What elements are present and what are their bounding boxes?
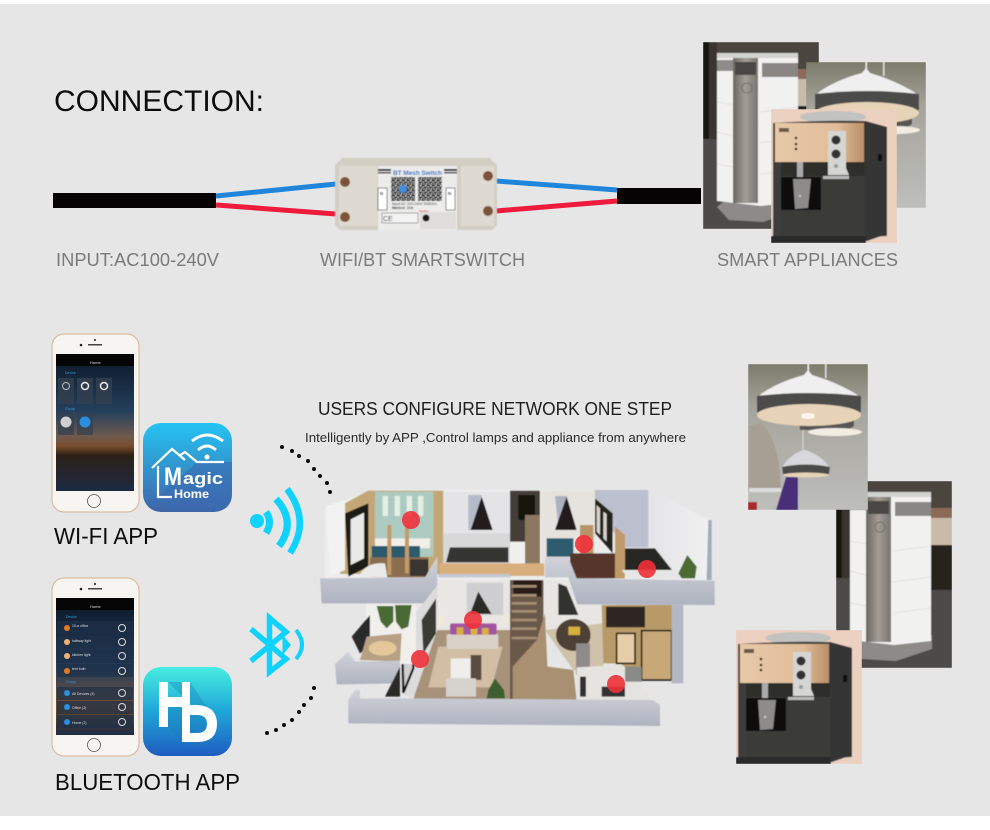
white end wall — [648, 490, 708, 578]
subheading: Intelligently by APP ,Control lamps and appliance from anywhere — [305, 431, 686, 445]
output black cable — [617, 188, 701, 204]
phone: bluetooth app: tent bulb — [72, 667, 85, 671]
dotted signal line: bluetooth — [265, 686, 316, 735]
phone: wi-fi app: Device — [65, 371, 76, 375]
label: bluetooth app: BLUETOOTH APP — [55, 769, 240, 795]
icon: wi-fi waves — [250, 489, 300, 553]
phone: bluetooth app: hallway light — [72, 639, 91, 643]
red output wire — [496, 201, 617, 211]
smart switch device: N — [448, 191, 451, 196]
smart switch device: N — [380, 191, 383, 196]
photo: air purifier — [836, 481, 952, 668]
red input wire — [216, 205, 336, 214]
smart switch device: Input:AC 100-240V 50/60Hz — [392, 202, 437, 206]
phone: bluetooth app — [52, 578, 139, 756]
wiring diagram — [53, 158, 701, 230]
left bedroom — [340, 491, 443, 574]
phone: wi-fi app — [52, 334, 139, 512]
phone: wi-fi app: Home — [90, 360, 101, 365]
appliance collage: top — [703, 42, 926, 243]
stair wall — [510, 491, 540, 562]
title: connection: CONNECTION: — [54, 85, 264, 118]
phone: bluetooth app: All Devices (4) — [72, 692, 95, 696]
left terrace — [335, 604, 416, 697]
central room — [443, 492, 510, 547]
illustration: two-storey house cutaway — [320, 490, 715, 726]
photo: pendant lamp — [748, 364, 868, 510]
phone: wi-fi app: Group — [65, 407, 75, 411]
photo: air purifier — [703, 42, 819, 229]
phone: bluetooth app: Group — [66, 680, 76, 684]
phone: bluetooth app: kitchen light — [72, 653, 91, 657]
label: input: INPUT:AC100-240V — [56, 250, 219, 270]
upper floor rooms — [325, 490, 712, 580]
photo: water dispenser — [771, 109, 897, 243]
smart switch device: Marked: 10A — [392, 206, 414, 210]
icon: magic home: M — [164, 463, 182, 491]
label: appliances: SMART APPLIANCES — [717, 250, 898, 270]
phone: bluetooth app: Office (2) — [72, 706, 86, 710]
stair well — [510, 577, 543, 700]
phone: bluetooth app: Home (2) — [72, 721, 87, 725]
gray-blue wall — [595, 490, 648, 547]
icon: bluetooth — [251, 618, 302, 672]
heading: configure network: USERS CONFIGURE NETWORK ONE STEP — [318, 399, 672, 419]
photo: pendant lamp — [806, 62, 926, 208]
label: wi-fi app: WI-FI APP — [54, 523, 158, 549]
living room back wall — [413, 580, 510, 633]
photo: water dispenser — [736, 630, 862, 764]
upper floor front walls — [320, 557, 715, 605]
kitchen — [602, 605, 677, 680]
bottom front wall — [348, 690, 660, 726]
blue output wire — [496, 181, 617, 190]
lower floor rooms — [401, 577, 683, 700]
living room floor — [413, 630, 510, 700]
icon: magic home: Home — [174, 487, 209, 501]
icon: magic home: agic — [183, 469, 223, 488]
icon: hd app — [143, 667, 232, 756]
blue input wire — [216, 184, 336, 196]
phone: bluetooth app: Home — [90, 604, 101, 609]
dining room wall and floor — [545, 578, 607, 700]
red device markers — [402, 511, 656, 693]
right bedroom — [542, 491, 595, 562]
smart switch device — [335, 158, 497, 230]
smart switch device: Restart — [419, 209, 429, 213]
smart switch device: CE — [383, 216, 393, 223]
label: switch: WIFI/BT SMARTSWITCH — [320, 250, 525, 270]
input black cable — [53, 193, 216, 208]
smart switch device: BT Mesh Switch — [393, 170, 442, 177]
side wall with glass doors — [401, 583, 437, 698]
icon: magic home — [143, 423, 232, 512]
appliance collage: bottom — [736, 364, 952, 764]
phone: bluetooth app: Device — [66, 615, 77, 619]
phone: bluetooth app: 10-a office — [72, 624, 88, 628]
dotted signal line: wi-fi — [280, 445, 332, 494]
